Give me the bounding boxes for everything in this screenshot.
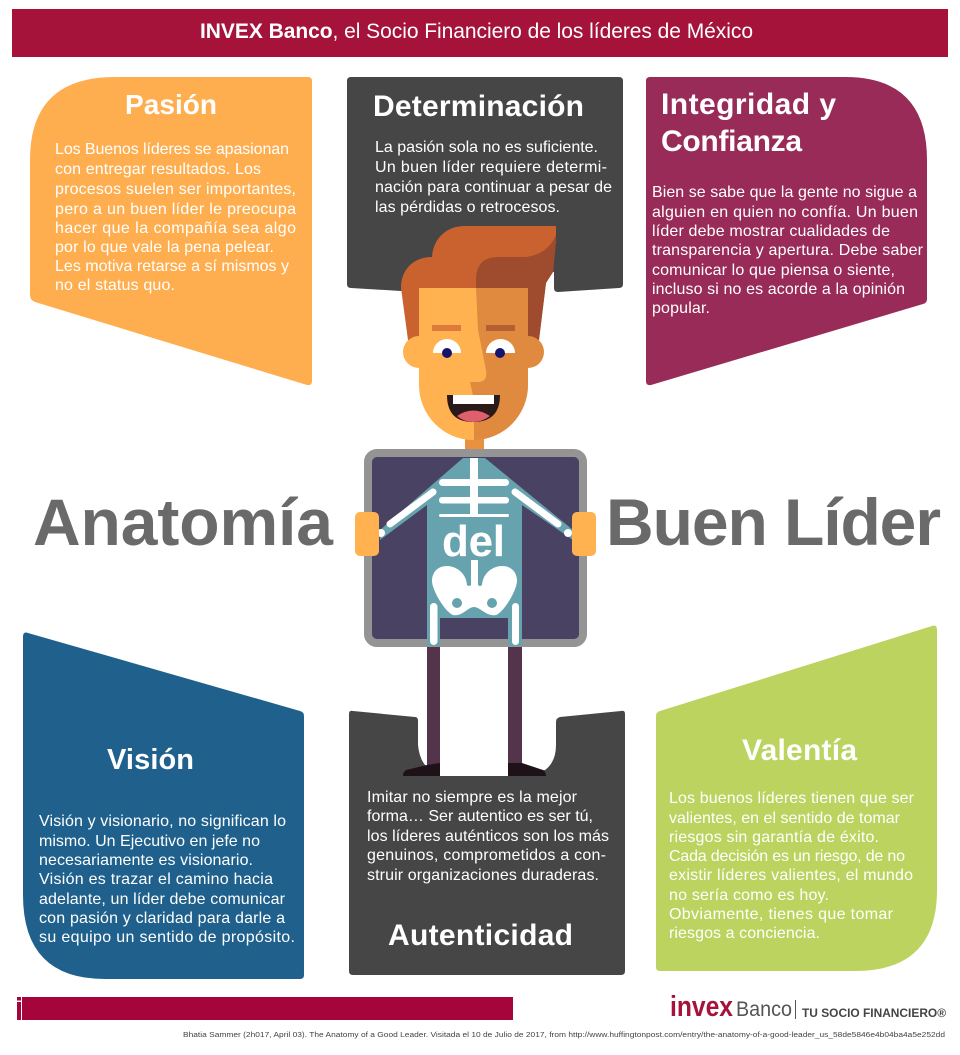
shoes: [403, 763, 546, 776]
text: Pasión body: pero a un buen líder le preocupa: [55, 201, 296, 218]
text: Integridad body: Bien se sabe que la gente no sigue a: [652, 184, 917, 201]
logo: invex Banco: invex: [670, 991, 733, 1023]
panel: Integridad y Confianza: [646, 77, 927, 385]
text: Pasión body: hacer que la compañía sea algo: [55, 220, 296, 237]
eyebrows: [432, 325, 515, 331]
logo: invex Banco: [670, 991, 946, 1023]
heading: Integridad y Confianza: [661, 88, 836, 158]
text: Valentía body: existir líderes valientes, el mundo: [669, 867, 913, 884]
legs: [427, 645, 522, 767]
text: Valentía body: Obviamente, tienes que tomar: [669, 906, 894, 923]
text: Integridad body: líder debe mostrar cualidades de: [652, 223, 890, 240]
text: Integridad body: comunicar lo que piensa o siente,: [652, 262, 895, 279]
ears: [403, 336, 544, 368]
text: Pasión body: no el status quo.: [55, 277, 175, 294]
citation: Bhatia Sammer (2h017, April 03). The Anatomy of a Good Leader. Visitada el 10 de Julio de 2017, from http://www.huffingtonpost.com/entry/the-anatomy-of-a-good-leader_us_58de5846e4b04ba4a5e252dd: [183, 1030, 945, 1039]
text: Pasión body: procesos suelen ser importantes,: [55, 181, 296, 198]
logo: invex Banco: TU SOCIO FINANCIERO®: [802, 1006, 946, 1020]
text: Integridad body: [652, 184, 924, 317]
footer bar: [17, 997, 513, 1020]
logo: invex Banco: Banco: [736, 998, 792, 1021]
eyes: [433, 339, 515, 358]
text: Valentía body: riesgos sin garantía de éxito.: [669, 829, 879, 846]
text: Autenticidad body: los líderes auténticos son los más: [367, 828, 609, 845]
text: Valentía body: no sería como es hoy.: [669, 887, 829, 904]
text: Autenticidad body: forma… Ser autentico es ser tú,: [367, 808, 593, 825]
text: Visión body: [39, 813, 295, 946]
text: Determinación body: las pérdidas o retrocesos.: [375, 199, 560, 216]
text: Determinación body: [375, 139, 612, 216]
panel: Pasión: [30, 77, 312, 385]
header banner: INVEX Banco, el Socio Financiero de los líderes de México: [200, 20, 753, 43]
text: Autenticidad body: [367, 789, 609, 884]
text: del: del: [442, 517, 505, 566]
text: Pasión body: por lo que vale la pena pelear.: [55, 239, 274, 256]
heading: Integridad y Confianza: Integridad y: [661, 88, 836, 121]
header banner: [12, 9, 948, 57]
text: Valentía body: [669, 790, 915, 942]
text: Integridad body: incluso si no es acorde a la opinión: [652, 281, 905, 298]
text: Visión body: su equipo un sentido de propósito.: [39, 929, 295, 946]
text: Integridad body: alguien en quien no confía. Un buen: [652, 204, 918, 221]
heading: Determinación: Determinación: [373, 90, 584, 123]
pelvis holes: [452, 598, 497, 608]
text: Pasión body: Los Buenos líderes se apasionan: [55, 141, 289, 158]
text: Determinación body: La pasión sola no es suficiente.: [375, 139, 598, 156]
text: Autenticidad body: Imitar no siempre es la mejor: [367, 789, 578, 806]
mouth: [447, 395, 500, 422]
panel: Determinación: [347, 77, 623, 292]
heading: Pasión: Pasión: [125, 89, 217, 120]
text: Valentía body: valientes, en el sentido de tomar: [669, 810, 901, 827]
text: Pasión body: con entregar resultados. Los: [55, 161, 261, 178]
text: Visión body: adelante, un líder debe comunicar: [39, 891, 286, 908]
text: Autenticidad body: genuinos, comprometidos a con-: [367, 847, 606, 864]
text: Integridad body: transparencia y apertura. Debe saber: [652, 242, 924, 259]
text: Pasión body: Les motiva retarse a sí mismos y: [55, 258, 289, 275]
text: Pasión body: [55, 141, 296, 294]
text: Integridad body: popular.: [652, 300, 710, 317]
text: Visión body: con pasión y claridad para darle a: [39, 910, 285, 927]
text: Visión body: necesariamente es visionario.: [39, 852, 253, 869]
hands: [355, 512, 596, 556]
neck: [465, 438, 484, 452]
text: Visión body: Visión es trazar el camino hacia: [39, 871, 273, 888]
heading: Valentía: Valentía: [742, 734, 857, 767]
hair: [401, 226, 556, 340]
text: Determinación body: Un buen líder requiere determi-: [375, 159, 607, 176]
text: Visión body: mismo. Un Ejecutivo en jefe no: [39, 833, 260, 850]
title: Buen Líder: Buen Líder: [606, 485, 941, 559]
panel: Valentía: [656, 626, 937, 971]
heading: Visión: Visión: [107, 744, 194, 776]
title: Anatomía: Anatomía: [33, 485, 334, 559]
text: Valentía body: Los buenos líderes tienen que ser: [669, 790, 915, 807]
text: Determinación body: nación para continuar a pesar de: [375, 179, 612, 196]
panel: Visión: [23, 632, 304, 979]
heading: Autenticidad: Autenticidad: [388, 919, 573, 952]
text: Autenticidad body: struir organizaciones duraderas.: [367, 867, 599, 884]
x-ray frame: [368, 453, 583, 643]
text: Valentía body: riesgos a conciencia.: [669, 925, 820, 942]
panel: Autenticidad: [349, 711, 625, 975]
text: Valentía body: Cada decisión es un riesgo, de no: [669, 848, 905, 865]
face: [419, 288, 528, 440]
text: Visión body: Visión y visionario, no significan lo: [39, 813, 286, 830]
illustration: leader figure: [355, 226, 596, 776]
skeleton torso: [380, 458, 573, 646]
heading: Integridad y Confianza: Confianza: [661, 125, 802, 158]
bones: [377, 458, 572, 645]
